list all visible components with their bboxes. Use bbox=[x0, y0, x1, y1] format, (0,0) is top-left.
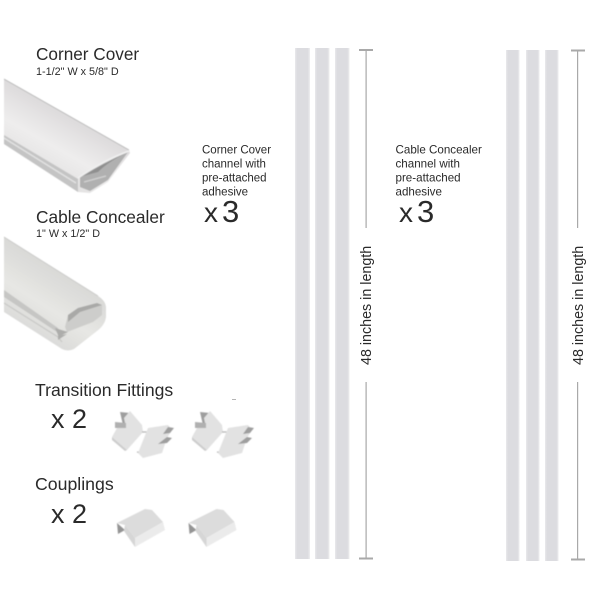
text block: Cable Concealer channel: adhesive bbox=[396, 186, 442, 198]
text block: Cable Concealer channel: pre-attached bbox=[396, 172, 461, 184]
icon: coupling 1 bbox=[117, 509, 165, 547]
icon: coupling 2 bbox=[188, 509, 236, 547]
quantity: x 3 cable concealer: x bbox=[399, 197, 413, 228]
text block: Corner Cover channel: channel with bbox=[202, 158, 266, 170]
icon: transition fitting 1 bbox=[112, 411, 174, 458]
icon: corner cover channel bbox=[4, 79, 130, 193]
dimension line: cable concealer length bbox=[571, 50, 585, 560]
quantity: x 2 couplings: x 2 bbox=[51, 499, 87, 529]
heading: Corner Cover: Corner Cover bbox=[36, 44, 139, 64]
dimension line: corner cover length bbox=[359, 49, 373, 560]
text block: Corner Cover channel: pre-attached bbox=[202, 172, 267, 184]
quantity: x 3 corner cover: x bbox=[204, 197, 218, 228]
heading: Couplings: Couplings bbox=[35, 474, 114, 494]
text block: Cable Concealer channel: Cable Concealer bbox=[396, 144, 482, 156]
text block: Corner Cover channel: Corner Cover bbox=[202, 144, 271, 156]
heading: Cable Concealer: Cable Concealer bbox=[36, 207, 165, 227]
icon: transition fitting 2 bbox=[192, 411, 254, 458]
label: 48 inches corner cover: 48 inches in length bbox=[359, 246, 375, 365]
dimensions: Cable Concealer: 1" W x 1/2" D bbox=[36, 228, 100, 240]
text block: Cable Concealer channel: channel with bbox=[396, 158, 460, 170]
quantity: x 3 cable concealer: 3 bbox=[417, 194, 434, 229]
icon: cable concealer channel bbox=[4, 237, 106, 350]
mark: small speck above fitting bbox=[232, 399, 236, 400]
strips: cable concealer channels bbox=[506, 50, 558, 561]
text block: Corner Cover channel: adhesive bbox=[202, 186, 248, 198]
label: 48 inches cable concealer: 48 inches in length bbox=[571, 246, 587, 365]
quantity: x 2 fittings: x 2 bbox=[51, 404, 87, 434]
quantity: x 3 corner cover: 3 bbox=[222, 194, 239, 229]
dimensions: Corner Cover: 1-1/2" W x 5/8" D bbox=[36, 66, 119, 78]
heading: Transition Fittings: Transition Fittings bbox=[35, 380, 173, 400]
strips: corner cover channels bbox=[295, 48, 350, 559]
